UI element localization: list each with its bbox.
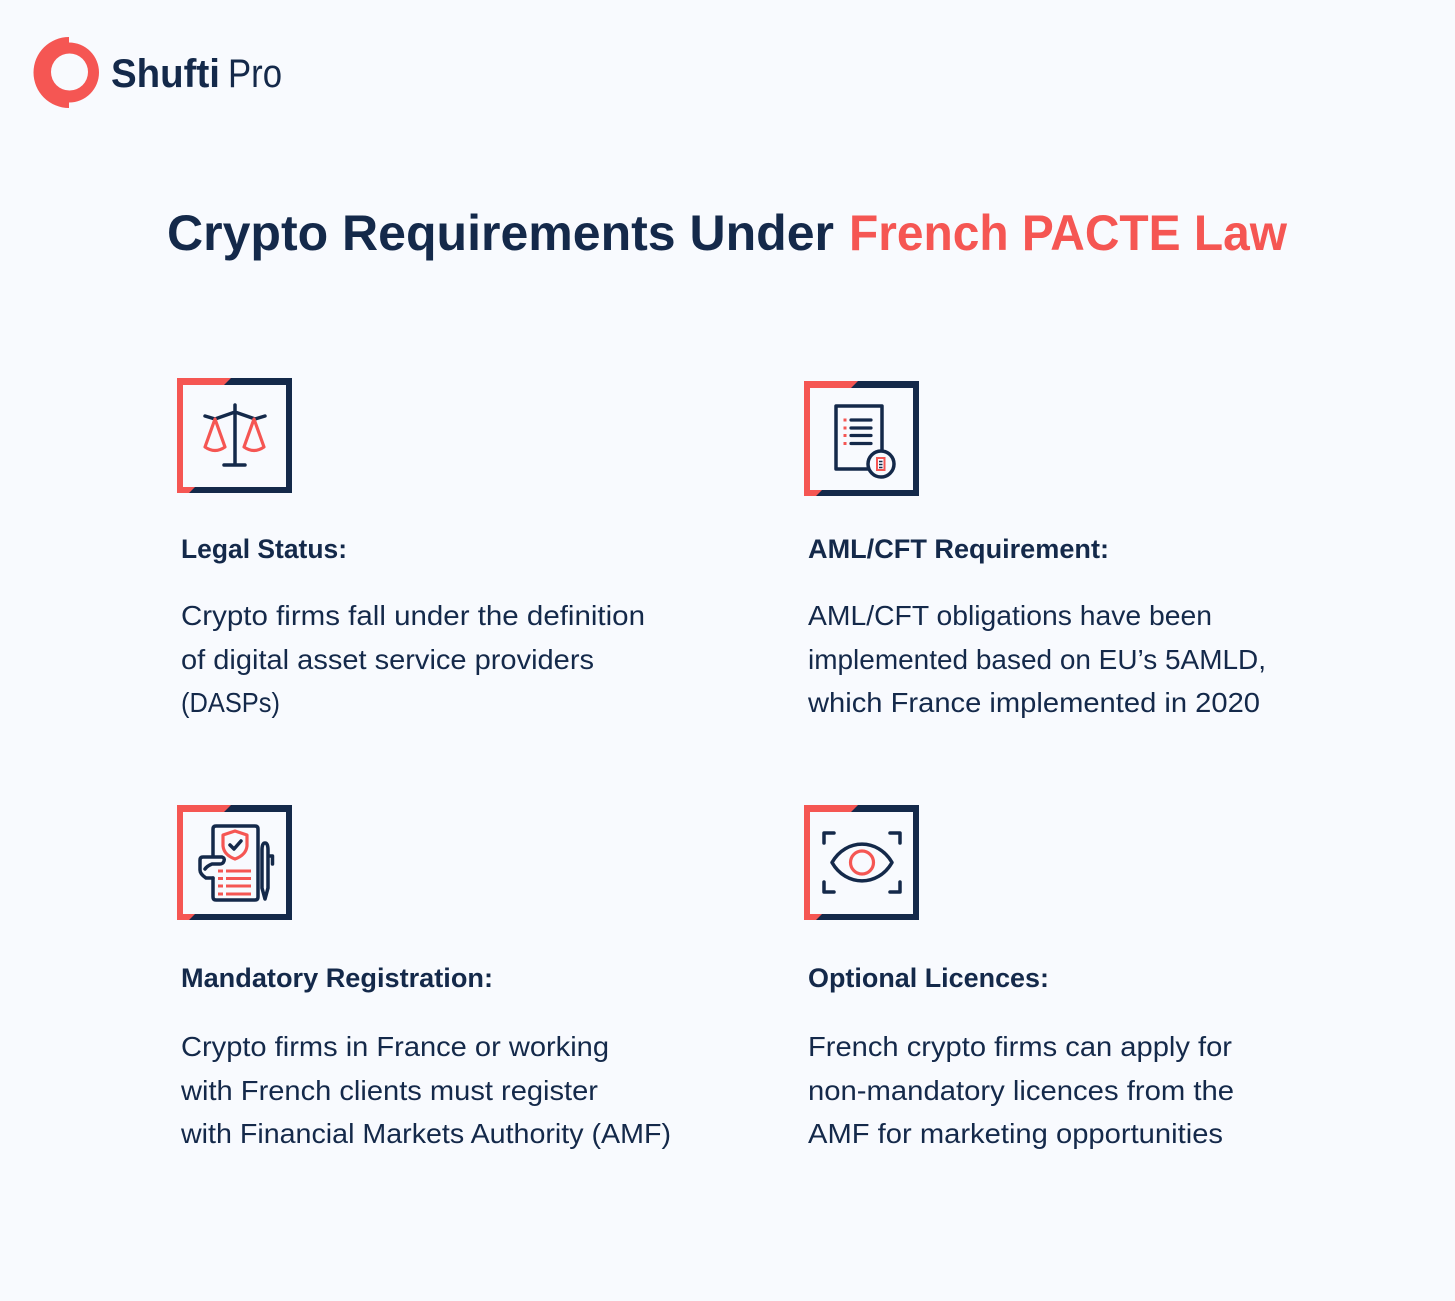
heading: Legal Status: xyxy=(181,534,347,564)
body text: with Financial Markets Authority (AMF) xyxy=(180,1118,671,1149)
heading: Mandatory Registration: xyxy=(181,963,493,993)
body text: non-mandatory licences from the xyxy=(808,1075,1234,1106)
body text xyxy=(181,600,645,718)
body text: Crypto firms fall under the definition xyxy=(181,600,645,631)
heading: Optional Licences: xyxy=(808,963,1049,993)
body text xyxy=(807,600,1266,718)
icon: eye in focus brackets xyxy=(804,805,919,920)
body text: AML/CFT obligations have been xyxy=(808,600,1212,631)
logo xyxy=(34,37,282,108)
body text: of digital asset service providers xyxy=(181,644,594,675)
panel: legal status xyxy=(177,378,645,718)
title: French PACTE Law xyxy=(849,205,1287,261)
panel: optional licences xyxy=(804,805,1234,1149)
icon: document with badge xyxy=(804,381,919,496)
body text: French crypto firms can apply for xyxy=(808,1031,1232,1062)
body text: which France implemented in 2020 xyxy=(807,687,1260,718)
body text: with French clients must register xyxy=(180,1075,598,1106)
icon: scales of justice xyxy=(177,378,292,493)
panel: mandatory registration xyxy=(177,805,671,1149)
body text: (DASPs) xyxy=(181,687,280,718)
logo wordmark: Shufti xyxy=(111,52,220,96)
logo wordmark xyxy=(111,52,282,96)
title: Crypto Requirements Under xyxy=(167,205,834,261)
body text: AMF for marketing opportunities xyxy=(808,1118,1223,1149)
title xyxy=(167,205,1287,261)
body text xyxy=(180,1031,671,1149)
body text: Crypto firms in France or working xyxy=(181,1031,609,1062)
logo wordmark: Pro xyxy=(228,52,282,96)
body text xyxy=(808,1031,1234,1149)
icon: registration document with shield and pen xyxy=(177,805,292,920)
body text: implemented based on EU’s 5AMLD, xyxy=(808,644,1266,675)
heading: AML/CFT Requirement: xyxy=(808,534,1109,564)
panel: AML/CFT requirement xyxy=(804,381,1266,718)
icon: logo ring xyxy=(34,37,99,108)
